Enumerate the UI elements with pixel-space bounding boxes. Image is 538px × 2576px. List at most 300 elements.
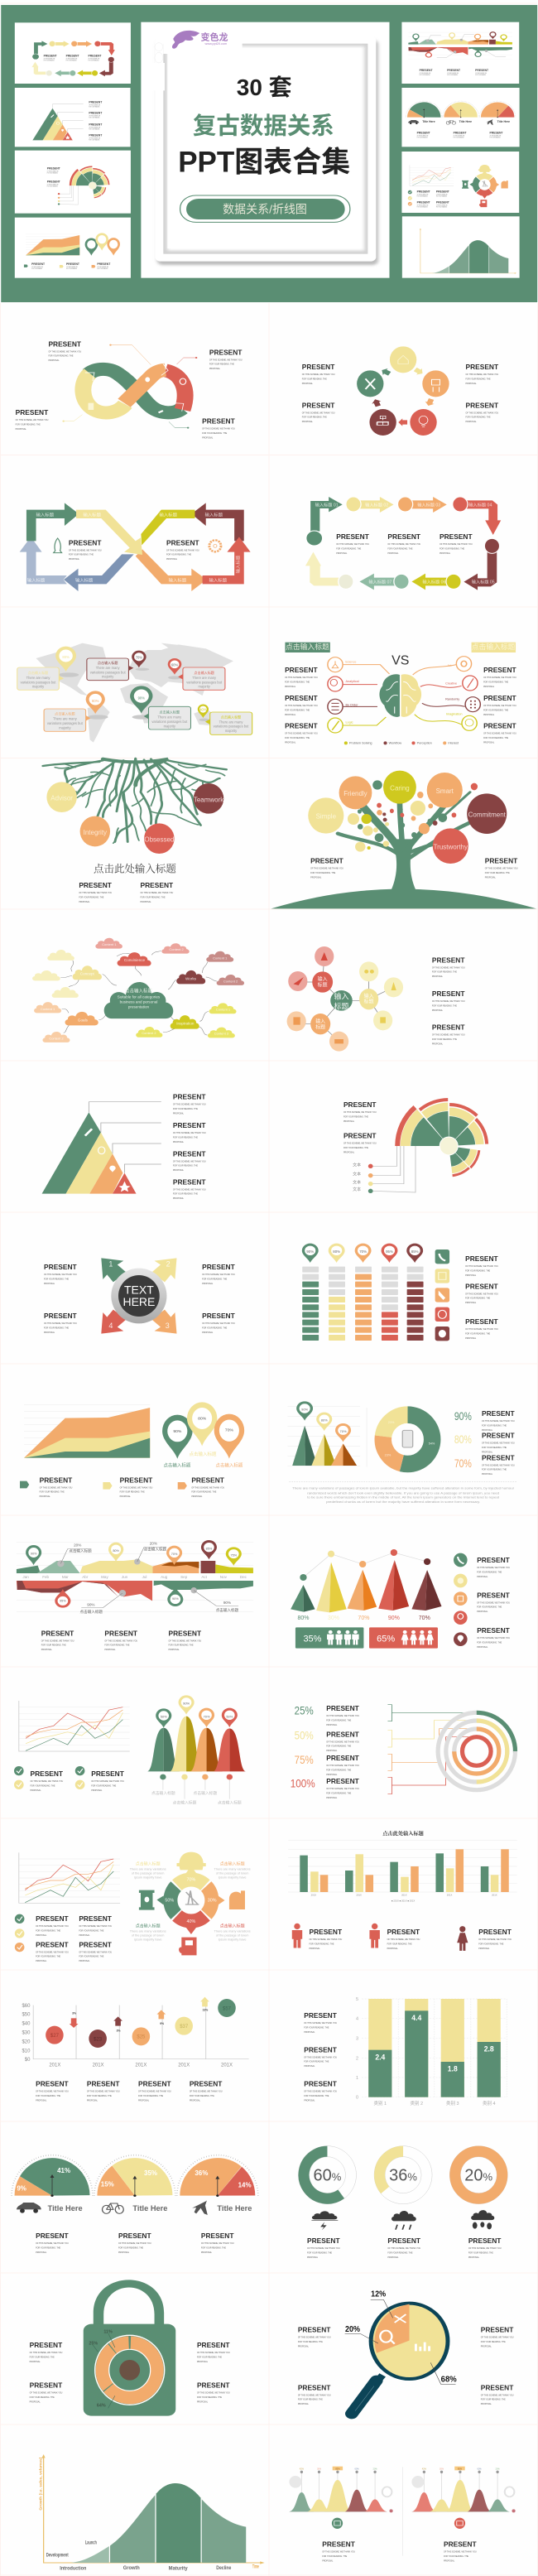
text block: OF THIS SCHEME, WE THANK YOU [173,1160,206,1163]
text block: FOR YOUR READING. THE [36,1929,61,1932]
bubble: friendly: Friendly [343,790,367,797]
gauge values: 36% [195,2169,208,2177]
text block [481,2326,514,2347]
tree dots [348,780,478,852]
thumbnail: line and oil: FOR YOUR READING [417,206,428,209]
centre cloud text [118,987,161,1009]
text block: OF THIS SCHEME, WE THANK YOU [444,2551,477,2554]
callout text: There are many [26,676,50,680]
ring values [89,2329,113,2409]
text block: FOR YOUR READING. THE [209,364,234,366]
icon: gear [209,540,221,551]
text block: PROPOSAL [466,421,477,423]
donut 20: 20% [464,2166,493,2184]
thumbnail: pyramid: FOR YOUR READING [89,139,99,142]
text block: OF THIS SCHEME, WE THANK YOU [483,733,516,735]
text block [478,1928,512,1950]
text block: OF THIS SCHEME, WE THANK YOU [36,1925,69,1928]
text block: PROPOSAL [69,558,80,561]
text block [79,881,113,903]
axis labels: 4 [356,2017,358,2022]
text block: PRESENT [30,2381,63,2390]
text block [477,1591,511,1613]
percent labels: 42% [300,2468,305,2471]
percent labels: 20% [373,2468,377,2471]
text block: PROPOSAL [481,2345,492,2347]
bell labels: 点击输入标题 [173,1800,197,1806]
thumbnail: line and oil: OF THIS SCHEME, WE [436,195,448,196]
thumbnail: line and oil: FOR YOUR READING [436,195,447,198]
thumbnail: line and oil: OF THIS SCHEME, WE [436,205,448,207]
series labels [353,1162,361,1192]
text block: FOR YOUR READING. THE [87,2095,112,2097]
text block: PRESENT [79,881,113,889]
text block [209,348,243,370]
stat card: men 35%: 35% [303,1635,322,1644]
gauge values: 41% [57,2167,70,2174]
text block: PRESENT [477,1556,511,1564]
percent figures: 90% [454,1409,472,1423]
text block: PROPOSAL [169,1649,180,1651]
text block: OF THIS SCHEME, WE THANK YOU [298,2394,331,2396]
text block: OF THIS SCHEME, WE THANK YOU [30,1780,63,1783]
month labels: Mar [62,1575,69,1579]
column: maroon 85%: 85% [411,1249,419,1254]
text block: FOR YOUR READING. THE [326,1769,352,1771]
text block: PRESENT [477,1591,511,1599]
panel: pyramid [42,1093,206,1200]
bubble: simple [308,797,343,834]
text block: PRESENT [79,1940,113,1948]
text block: FOR YOUR READING. THE [310,1943,334,1945]
text block [30,2341,63,2363]
text block: FOR YOUR READING. THE [173,1108,198,1110]
text block [197,2381,230,2403]
column: orange 70% [355,1244,372,1341]
text block [466,363,499,385]
text block: PRESENT [481,2326,514,2334]
text block: OF THIS SCHEME, WE THANK YOU [48,350,81,353]
text block: PROPOSAL [48,359,60,362]
pin labels: 90% [138,696,145,700]
text block: PROPOSAL [343,1120,355,1123]
gauge titles: Title Here [48,2204,83,2212]
text block [104,1629,138,1651]
text block: PRESENT [483,722,517,730]
axis labels: 3 [356,2036,358,2041]
title: 30 sets: 30 套 [237,75,292,100]
text block: PRESENT [173,1093,206,1101]
axis labels: 201X [93,2063,104,2068]
thumbnail: arrow loop: FOR YOUR READING [89,59,98,61]
text block: PRESENT [36,2080,70,2088]
pin labels: 60% [171,663,178,667]
text block: PRESENT [40,1476,73,1484]
bubble: trustworthy [433,828,468,864]
connector labels: Randomly [445,698,459,701]
text block [173,1177,206,1200]
callout text [21,660,249,733]
text block: OF THIS SCHEME, WE THANK YOU [79,1925,112,1928]
callout labels: 90% [223,1601,231,1605]
node labels: 输入 [315,1018,325,1024]
oil callouts: of the passage of lorem [132,1934,164,1938]
text block: FOR YOUR READING. THE [16,423,41,426]
text block [16,408,49,431]
curve labels: Maturity [169,2567,188,2572]
text block [36,1940,70,1962]
arrow labels [315,501,495,585]
text block: FOR YOUR READING. THE [485,872,510,874]
text block: PROPOSAL [440,552,451,555]
ring values: 30% [208,1899,217,1904]
text block: OF THIS SCHEME, WE THANK YOU [326,1765,359,1767]
arrows [70,1997,209,2028]
text block: FOR YOUR READING. THE [30,1784,55,1787]
logo [172,31,228,49]
text block: OF THIS SCHEME, WE THANK YOU [482,1442,515,1445]
text block [483,694,517,716]
text block: OF THIS SCHEME, WE THANK YOU [302,412,335,414]
thumbnail: polar chart: OF THIS SCHEME, WE [47,171,59,172]
text block: FOR YOUR READING. THE [41,1644,66,1647]
bubbles: $57 [223,2006,232,2011]
text block: PRESENT [343,1100,377,1109]
text block: PROPOSAL [322,2559,334,2562]
text block: PROPOSAL [432,975,444,978]
text block: PROPOSAL [387,2256,399,2259]
axis labels [356,1997,495,2107]
text block [41,1629,74,1651]
legend: Perception [417,742,432,745]
text block: PROPOSAL [202,1331,214,1334]
text block: FOR YOUR READING. THE [169,1644,194,1647]
thumbnail: timeline: PRESENT [475,69,489,72]
callout text: majority [164,724,176,728]
text block: FOR YOUR READING. THE [304,2026,329,2029]
arrow values [72,2008,208,2032]
axis title: Growth (i.e. sales, volumes) [39,2457,44,2511]
text block: FOR YOUR READING. THE [322,2555,348,2558]
axis labels: 1 [356,2076,358,2081]
cloud labels: Content 2 [169,947,184,951]
text block [191,1476,225,1498]
text block [326,1777,360,1799]
callout text: There are many [53,717,78,721]
bubble: caring [383,771,416,804]
text block: PROPOSAL [87,2099,98,2102]
text block: PROPOSAL [30,2361,41,2363]
axis labels: 201X [492,1894,497,1897]
text block: PROPOSAL [166,558,178,561]
text block: PROPOSAL [326,1774,338,1776]
thumbnail: gauges: OF THIS SCHEME, WE [490,135,501,137]
oil callouts: ipsum majority have [219,1938,246,1942]
callout text: variations passages but [21,680,56,684]
percent labels: 85% [458,2468,463,2471]
text block: PROPOSAL [465,1337,477,1340]
text block [36,2080,70,2102]
donut 60: 60% [313,2166,342,2184]
text block: PRESENT [285,722,319,730]
thumbnail: gauges: OF THIS SCHEME, WE [454,135,464,137]
text block: FOR YOUR READING. THE [468,2251,493,2254]
text block: PROPOSAL [79,901,90,903]
thumbnail: pyramid: PRESENT [89,112,103,115]
thumbnail: line and oil [401,152,519,213]
text block: PROPOSAL [285,686,296,688]
thumbnail: area chart: PRESENT [31,262,46,266]
text block: PRESENT [322,2540,356,2549]
text block: PROPOSAL [326,1724,338,1726]
text block: FOR YOUR READING. THE [197,2356,222,2358]
text block: PROPOSAL [141,901,151,903]
text block: PRESENT [304,2045,338,2054]
callout text: 点击输入标题 [194,670,214,675]
bubble: obsessed: Obsessed [144,836,174,844]
donut chart: 23% [385,1453,391,1457]
gauge values: 9% [17,2184,26,2192]
thumbnail: pyramid: FOR YOUR READING [89,117,99,119]
thumbnail: pyramid [15,88,131,147]
text block [343,1132,377,1153]
text block: PRESENT [310,1928,343,1936]
text block: FOR YOUR READING. THE [440,547,464,550]
month labels: Nov [220,1575,228,1579]
chart right [411,2467,516,2529]
text block: PROPOSAL [326,1750,338,1752]
pin labels: 80% [92,699,99,703]
panel: mini triangle charts [289,2467,516,2562]
thumbnail: pyramid: OF THIS SCHEME, WE [89,104,100,106]
callout labels [69,1542,239,1615]
text block: PROPOSAL [79,1934,90,1937]
thumbnail: pyramid: FOR YOUR READING [89,128,99,130]
text block: FOR YOUR READING. THE [91,1784,117,1787]
text block: OF THIS SCHEME, WE THANK YOU [432,1000,465,1003]
callout text: 点击输入标题 [55,711,75,716]
percent labels: 30% [317,2468,322,2471]
text block: FOR YOUR READING. THE [141,896,166,898]
text block: PROPOSAL [40,1495,50,1498]
text block: FOR YOUR READING. THE [481,2399,506,2401]
axis labels: 5 [356,1997,358,2002]
gauge values [17,2167,252,2192]
text block: PRESENT [482,1409,515,1418]
thumbnail: arrow loop: OF THIS SCHEME, WE [66,58,77,60]
text block [482,1453,515,1476]
panel: 3D pyramids [291,1549,511,1649]
text block: OF THIS SCHEME, WE THANK YOU [482,1464,515,1466]
text block [190,2080,223,2102]
cloud labels: Goals [78,1018,89,1022]
panel: double arrow infinity [20,503,251,591]
text block: PRESENT [190,2080,223,2088]
arrow labels: 输入标题 01 [315,501,339,508]
tree shape [271,792,536,908]
centre cloud text: Suitable for all categories [118,995,161,999]
text block: PRESENT [120,1476,153,1484]
bell values: 70% [204,1714,210,1718]
thumbnail: polar chart: OF THIS SCHEME, WE [47,184,59,185]
text block: OF THIS SCHEME, WE THANK YOU [468,2247,502,2250]
text block: OF THIS SCHEME, WE THANK YOU [482,1420,515,1423]
gauge titles [48,2204,252,2212]
thumbnail: pyramid: OF THIS SCHEME, WE [89,127,100,128]
text block: PRESENT [432,989,465,998]
text block: PRESENT [326,1704,360,1712]
text block: PROPOSAL [298,2403,310,2405]
text block: PROPOSAL [483,741,495,744]
bubble: integrity [80,816,110,846]
VS: VS [391,653,409,667]
percent figures: 70% [454,1457,472,1470]
text block: OF THIS SCHEME, WE THANK YOU [387,543,420,546]
text block: FOR YOUR READING. THE [173,1165,198,1168]
arrow labels: 输入标题 [234,555,241,573]
text block: PRESENT [465,1317,499,1326]
pin values [31,1547,238,1603]
text block: PRESENT [326,1754,360,1762]
thumbnail: area chart: PRESENT [66,262,80,266]
text block: FOR YOUR READING. THE [387,2251,413,2254]
text block: OF THIS SCHEME, WE THANK YOU [466,412,499,414]
callout labels: 点击输入标题 [144,1546,167,1552]
cloud labels: Concept [80,971,95,975]
text block: OF THIS SCHEME, WE THANK YOU [304,2091,337,2093]
arrow labels [27,511,241,583]
mini pyramids: 80% [321,1418,328,1423]
text block: PROPOSAL [285,741,296,744]
text block: PROPOSAL [173,1112,185,1115]
text block: PROPOSAL [201,2251,213,2254]
icon circles [328,657,480,733]
text block: FOR YOUR READING. THE [79,896,104,898]
text block: PRESENT [466,363,499,371]
text block: PRESENT [465,1254,499,1263]
thumbnail: pyramid: PRESENT [89,134,103,137]
text block: PROPOSAL [30,1789,41,1792]
lens values: 12% [371,2290,387,2299]
padlock body [84,2280,175,2416]
thumbnail: timeline: FOR YOUR READING [420,74,430,76]
axis labels: 201X [135,2063,147,2068]
text block: OF THIS SCHEME, WE THANK YOU [16,419,49,421]
mini pyramids [287,1401,367,1467]
panel: brain VS [285,642,517,745]
text block: PRESENT [285,666,319,674]
text block: FOR YOUR READING. THE [304,2095,329,2097]
paragraph: predefined chunks as of lorem but the majority have suffered alteration in some form necessary. [326,1500,480,1504]
mini pyramids: 70% [340,1429,347,1433]
thumbnail: area chart: OF THIS SCHEME, WE [97,267,108,268]
text block: PROPOSAL [477,1646,488,1649]
stacked columns: 2.4 [375,2053,385,2061]
text block: FOR YOUR READING. THE [336,547,362,550]
panel: padlock [30,2280,230,2416]
cloud labels: Content 2 [223,979,238,983]
cloud labels: Content 2 [49,1036,64,1040]
text block: OF THIS SCHEME, WE THANK YOU [481,2394,514,2396]
text block: PROPOSAL [468,2256,480,2259]
axis labels [311,1894,497,1902]
curve labels [46,2540,259,2572]
text block: OF THIS SCHEME, WE THANK YOU [322,2551,355,2554]
text block: FOR YOUR READING. THE [44,1327,69,1329]
text block: FOR YOUR READING. THE [202,1327,228,1329]
text block: OF THIS SCHEME, WE THANK YOU [483,705,516,707]
axis labels: 0 [356,2096,358,2101]
infinity ribbon [83,364,186,412]
text block: PROPOSAL [307,2256,319,2259]
text block [79,1914,113,1937]
hub: TEXT [124,1283,154,1297]
bell labels: 点击输入标题 [194,1790,217,1796]
stat card: men 35% [295,1627,363,1649]
pin values: 85% [206,1547,213,1550]
title: green line: 复古数据关系 [193,113,334,140]
nodes [287,946,403,1052]
pyramids [291,1549,442,1612]
text block [285,666,319,688]
column: yellow 80%: 80% [333,1249,340,1254]
percent labels: 85% [335,2468,340,2471]
panel: tree [271,771,536,908]
text block [477,1626,511,1649]
text block [138,2080,171,2102]
text block: FOR YOUR READING. THE [466,416,491,419]
text block: OF THIS SCHEME, WE THANK YOU [477,1601,510,1604]
text block: PROPOSAL [197,2400,209,2403]
text block: OF THIS SCHEME, WE THANK YOU [197,2392,230,2395]
axis labels: $20 [22,2039,31,2044]
bubble: teamwork: Teamwork [194,796,223,803]
text block: PRESENT [478,1928,512,1936]
cloud labels: Content 1 [41,1007,55,1011]
pin labels: 点击输入标题 [190,1451,217,1457]
text block [304,2045,338,2068]
node labels: 标题 [334,1001,348,1010]
text block [483,722,517,744]
arrow values: 3% [117,2029,120,2032]
text block: FOR YOUR READING. THE [477,1641,502,1644]
panel: weather donuts [295,2142,507,2259]
bell labels: 点击输入标题 [218,1800,242,1806]
text block: OF THIS SCHEME, WE THANK YOU [190,2091,223,2093]
callout labels: 点击输入标题 [69,1548,92,1554]
oil callouts: of the passage of lorem [216,1934,248,1938]
text block [432,1023,465,1045]
text block: FOR YOUR READING. THE [483,681,508,683]
text block [285,694,319,716]
stacked columns: 1.8 [448,2064,458,2073]
text block: PRESENT [481,2383,514,2391]
thumbnail: gauges: PRESENT [417,131,431,134]
text block: OF THIS SCHEME, WE THANK YOU [302,373,335,376]
arrow labels: 输入标题 [36,511,55,518]
text block: OF THIS SCHEME, WE THANK YOU [285,705,318,707]
callout text: majority [32,685,45,689]
ring values: 25% [89,2341,98,2346]
arrow labels: 输入标题 [27,576,46,583]
text block: FOR YOUR READING. THE [138,2095,163,2097]
node labels [315,976,374,1030]
text block [481,2383,514,2405]
text block: PRESENT [485,857,518,865]
arrow labels: 输入标题 05 [472,579,495,585]
text block: PROPOSAL [336,552,348,555]
text block [307,2237,340,2259]
